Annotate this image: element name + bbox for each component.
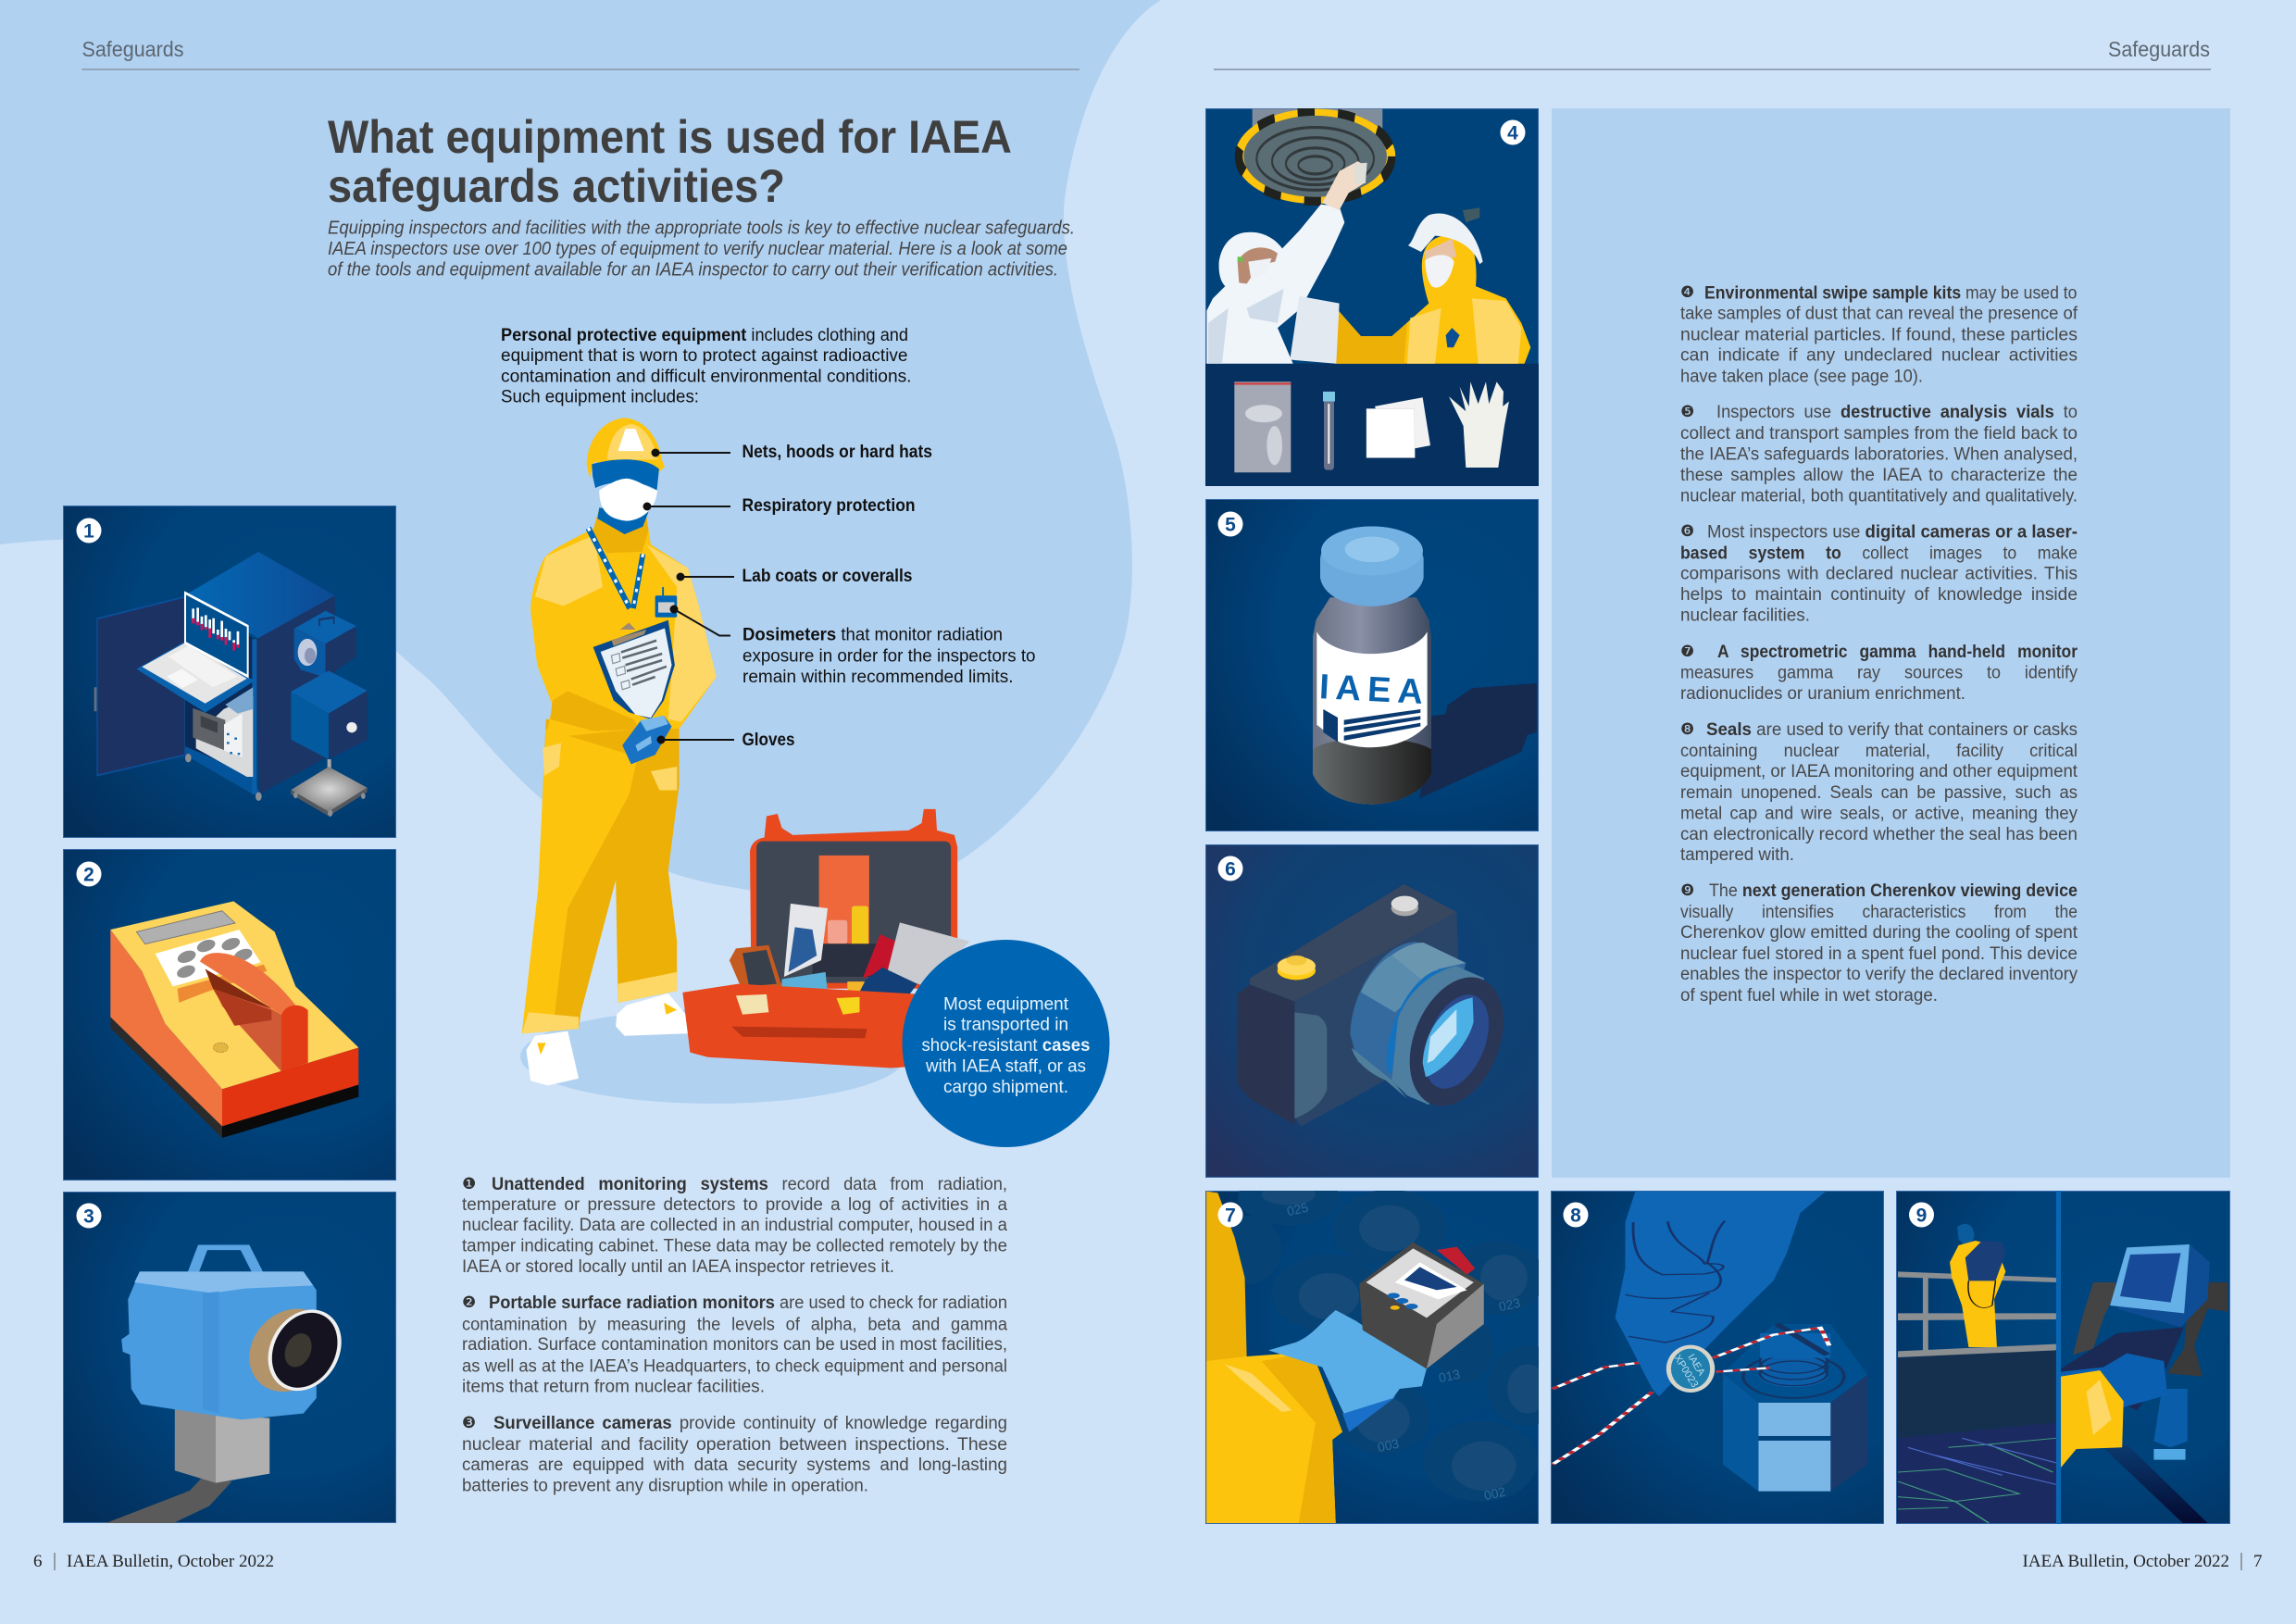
- callout circle: transport cases: [902, 940, 1109, 1147]
- sampling bag: [1234, 381, 1291, 472]
- item 6: comparisons with declared nuclear activities. This: [1680, 565, 2078, 583]
- seal text: [1671, 1347, 1710, 1390]
- right page header: Safeguards: [2108, 37, 2210, 61]
- item 3: cameras are equipped with data security systems and long-lasting: [462, 1455, 1007, 1475]
- text block: items 1 to 3: [462, 1175, 1007, 1496]
- monitor background numbers: 002: [1482, 1484, 1507, 1503]
- label: dosimeters: Dosimeters that monitor radiation: [742, 626, 1003, 644]
- title: What equipment is used for IAEA: [328, 111, 1012, 163]
- item 6: [1680, 522, 2078, 626]
- item 8: Seals are used to verify that containers or casks: [1706, 720, 2078, 740]
- badge 5: [1218, 511, 1242, 537]
- item 6: Most inspectors use digital cameras or a laser-: [1707, 522, 2078, 543]
- callout circle: transport cases: Most equipment: [943, 994, 1069, 1015]
- personal protective equipment text: contamination and difficult environmental conditions.: [501, 367, 911, 387]
- badge 5: 5: [1225, 515, 1236, 535]
- item 9: of spent fuel while in wet storage.: [1680, 986, 1938, 1006]
- personal protective equipment text: Such equipment includes:: [501, 387, 699, 407]
- sensor camera: [294, 611, 356, 678]
- mask: [599, 479, 657, 521]
- item 3: nuclear material and facility operation between inspections. These: [462, 1435, 1007, 1455]
- data logger hardware: [193, 687, 253, 777]
- text panel background: [1552, 108, 2230, 1178]
- vial label: IAEA: [1318, 668, 1424, 712]
- item 5: collect and transport samples from the field back to: [1680, 424, 2078, 443]
- monitor background numbers: 013: [1437, 1367, 1462, 1385]
- label: gloves: Gloves: [742, 731, 794, 750]
- item 3: Surveillance cameras provide continuity of knowledge regarding: [493, 1414, 1007, 1433]
- label: respiratory: Respiratory protection: [742, 496, 915, 516]
- item 2: radiation. Surface contamination monitors can be used in most facilities,: [462, 1335, 1007, 1355]
- title: safeguards activities?: [328, 160, 785, 212]
- gloves: [622, 716, 672, 764]
- swipe cards: [1366, 397, 1430, 457]
- badge 1: 1: [83, 520, 94, 543]
- item 9: enables the inspector to verify the declared inventory: [1680, 965, 2078, 984]
- item 8: equipment, or IAEA monitoring and other equipment: [1680, 762, 2078, 781]
- item 9: [1680, 881, 2078, 1006]
- right footer: IAEA Bulletin, October 2022: [2022, 1552, 2229, 1571]
- text block: items 4 to 9: [1680, 283, 2078, 1006]
- item 1: tamper indicating cabinet. These data may be collected remotely by the: [462, 1237, 1007, 1255]
- item 7: measures gamma ray sources to identify: [1680, 663, 2078, 683]
- badge 6: 6: [1225, 859, 1236, 880]
- monitor background numbers: [1285, 1200, 1522, 1503]
- item 4: [1680, 283, 2078, 387]
- figure: inspector in protective suit: [522, 418, 717, 1085]
- badge 2: 2: [83, 865, 94, 885]
- seal text: XP0023: [1671, 1353, 1700, 1390]
- item 4: ❹: [1680, 283, 1694, 302]
- panel 6: digital camera: [1205, 844, 1539, 1178]
- item 1: ❶: [462, 1175, 476, 1193]
- item 8: containing nuclear material, facility critical: [1680, 742, 2078, 761]
- seal wire: [1553, 1328, 1829, 1465]
- item 9: Cherenkov glow emitted during the cooling of spent: [1680, 923, 2078, 943]
- lanyard: [588, 528, 643, 608]
- gloved hand: [1616, 1192, 1826, 1396]
- item 6: helps to maintain continuity of knowledge inside: [1680, 585, 2078, 605]
- left footer: 6: [33, 1552, 43, 1571]
- item 9: The next generation Cherenkov viewing device: [1709, 881, 2078, 901]
- item 6: based system to collect images to make: [1680, 544, 2078, 563]
- icon: equipment case: [682, 809, 969, 1068]
- badge 7: [1218, 1202, 1242, 1228]
- label: coveralls: Lab coats or coveralls: [742, 567, 913, 586]
- callout circle: transport cases: with IAEA staff, or as: [925, 1057, 1086, 1076]
- label: hats: Nets, hoods or hard hats: [742, 443, 932, 462]
- item 9: ❾: [1680, 881, 1694, 900]
- badge 3: [76, 1204, 102, 1228]
- personal protective equipment text: Personal protective equipment includes clothing and: [501, 326, 908, 345]
- badge 8: 8: [1570, 1206, 1581, 1226]
- left footer: IAEA Bulletin, October 2022: [67, 1552, 274, 1571]
- item 7: radionuclides or uranium enrichment.: [1680, 684, 1965, 704]
- badge 9: [1909, 1202, 1934, 1228]
- glove: [1449, 381, 1509, 468]
- panel 7: gamma hand-held monitor: [1205, 1169, 1568, 1524]
- railing: [1898, 1271, 2056, 1357]
- laptop: [136, 593, 255, 713]
- item 5: these samples allow the IAEA to characterize the: [1680, 466, 2078, 485]
- intro text: Equipping inspectors and facilities with the appropriate tools is key to effective nuclear safeguards.: [328, 219, 1075, 239]
- monitor background numbers: 025: [1285, 1200, 1310, 1218]
- label: dosimeters: remain within recommended limits.: [742, 668, 1013, 687]
- item 4: Environmental swipe sample kits may be used to: [1704, 283, 2078, 304]
- item 4: nuclear material particles. If found, these particles: [1680, 326, 2078, 344]
- panel 1: monitoring cabinet: [63, 506, 396, 838]
- item 4: have taken place (see page 10).: [1680, 367, 1923, 387]
- intro text: [328, 219, 1075, 280]
- hazard ring: [1235, 108, 1395, 204]
- item 7: A spectrometric gamma hand-held monitor: [1717, 643, 2078, 662]
- seal text: IAEA: [1685, 1352, 1707, 1379]
- item 5: the IAEA’s safeguards laboratories. When analysed,: [1680, 444, 2078, 465]
- item 7: ❼: [1680, 643, 1694, 661]
- item 1: temperature or pressure detectors to provide a log of activities in a: [462, 1195, 1007, 1215]
- item 6: nuclear facilities.: [1680, 606, 1810, 626]
- monitor background numbers: 003: [1376, 1436, 1401, 1455]
- panel 5: destructive analysis vial: [1205, 499, 1539, 831]
- item 1: Unattended monitoring systems record data from radiation,: [492, 1175, 1007, 1194]
- boots: [526, 993, 688, 1085]
- panel 3: surveillance camera: [63, 1192, 396, 1525]
- personal protective equipment text: equipment that is worn to protect against radioactive: [501, 346, 907, 366]
- panel 8: seals: [1551, 1191, 1884, 1524]
- callout circle: transport cases: cargo shipment.: [943, 1078, 1068, 1097]
- item 8: tampered with.: [1680, 845, 1794, 865]
- callout circle: transport cases: is transported in: [943, 1015, 1068, 1035]
- item 3: [462, 1414, 1007, 1496]
- item 5: [1680, 403, 2078, 506]
- intro text: IAEA inspectors use over 100 types of equipment to verify nuclear material. Here is a look at some: [328, 239, 1067, 259]
- hand-held monitor: [1359, 1243, 1484, 1368]
- item 9: nuclear fuel stored in a spent fuel pond. This device: [1680, 944, 2078, 964]
- panel 4: environmental swipe sampling: [1205, 108, 1539, 486]
- right footer: 7: [2253, 1552, 2263, 1571]
- item 8: ❽: [1680, 720, 1694, 739]
- item 9: visually intensifies characteristics from the: [1680, 903, 2078, 922]
- item 4: can indicate if any undeclared nuclear activities: [1680, 346, 2078, 365]
- Cherenkov device: [2061, 1244, 2227, 1523]
- monitor background numbers: 023: [1497, 1295, 1522, 1314]
- item 5: ❺: [1680, 403, 1694, 421]
- item 8: remain unopened. Seals can be passive, such as: [1680, 783, 2078, 803]
- badge 7: 7: [1225, 1206, 1236, 1226]
- spent fuel pond: [1898, 1344, 2056, 1523]
- inspector in yellow suit: [1336, 207, 1530, 364]
- label: dosimeters: [742, 626, 1035, 687]
- title: [328, 111, 1012, 212]
- inspector in white suit: [1206, 161, 1367, 364]
- badge 3: 3: [83, 1206, 94, 1228]
- intro text: of the tools and equipment available for an IAEA inspector to carry out their verification activities.: [328, 259, 1058, 280]
- panel 2: surface radiation monitor: [63, 849, 396, 1181]
- item 1: [462, 1175, 1007, 1277]
- item 2: Portable surface radiation monitors are used to check for radiation: [489, 1293, 1007, 1313]
- metal cap seal: [1666, 1345, 1715, 1393]
- item 5: nuclear material, both quantitatively and qualitatively.: [1680, 487, 2078, 506]
- callout leaders: [644, 450, 734, 743]
- badge 4: 4: [1507, 122, 1518, 144]
- background blob: [0, 0, 1161, 893]
- item 6: ❻: [1680, 522, 1694, 541]
- item 3: ❸: [462, 1414, 476, 1432]
- item 1: nuclear facility. Data are collected in an industrial computer, housed in a: [462, 1216, 1007, 1235]
- badge 9: 9: [1916, 1206, 1927, 1226]
- badge 1: [76, 518, 102, 543]
- badge 2: [76, 861, 102, 887]
- vial: [1323, 392, 1335, 470]
- item 2: ❷: [462, 1293, 476, 1312]
- item 2: as well as at the IAEA’s Headquarters, to check equipment and personal: [462, 1357, 1007, 1376]
- label: dosimeters: exposure in order for the inspectors to: [742, 646, 1035, 667]
- item 8: can electronically record whether the seal has been: [1680, 825, 2078, 844]
- item 7: [1680, 643, 2078, 704]
- callout circle: transport cases: shock-resistant cases: [922, 1036, 1091, 1056]
- clipboard: [593, 620, 675, 719]
- panel 9: Cherenkov viewing device: [1896, 1191, 2230, 1524]
- floor shadow: [520, 1009, 905, 1104]
- left page header: Safeguards: [81, 37, 183, 61]
- item 8: metal cap and wire seals, or active, meaning they: [1680, 804, 2078, 824]
- personal protective equipment text: [501, 326, 911, 407]
- badge 4: [1500, 120, 1526, 144]
- item 4: take samples of dust that can reveal the presence of: [1680, 304, 2078, 324]
- badge 6: [1218, 856, 1242, 881]
- goggles: [592, 459, 659, 490]
- inspector on bridge: [1950, 1224, 2005, 1347]
- item 1: IAEA or stored locally until an IAEA inspector retrieves it.: [462, 1257, 894, 1277]
- dosimeter: [655, 587, 677, 618]
- item 8: [1680, 720, 2078, 865]
- item 2: contamination by measuring the levels of alpha, beta and gamma: [462, 1315, 1007, 1335]
- sealed container: [1723, 1324, 1867, 1492]
- item 2: [462, 1293, 1007, 1396]
- item 5: Inspectors use destructive analysis vials to: [1716, 403, 2078, 422]
- badge 8: [1563, 1202, 1589, 1228]
- camera lens: [249, 1309, 342, 1393]
- helmet: [587, 418, 665, 479]
- item 3: batteries to prevent any disruption while in operation.: [462, 1476, 868, 1496]
- item 2: items that return from nuclear facilities.: [462, 1378, 765, 1396]
